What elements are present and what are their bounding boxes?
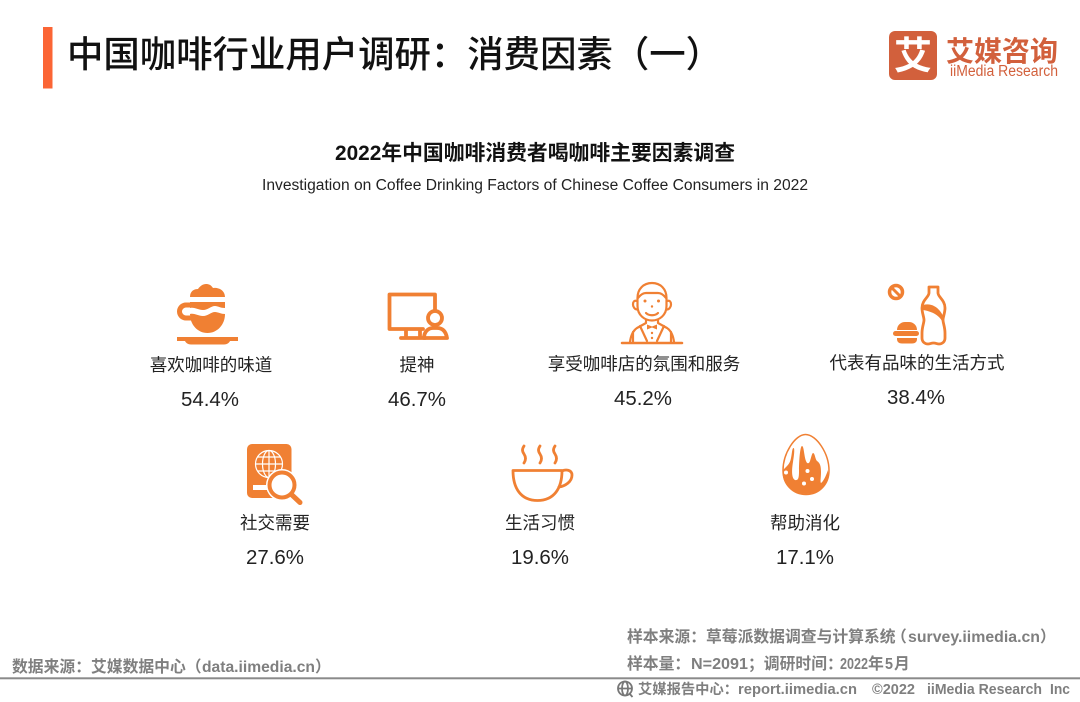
footer credit: report.iimedia.cn [738,682,857,698]
title: 中国咖啡行业用户调研：消费因素（一） [67,34,722,75]
logo: iiMedia Research [889,31,1058,80]
sample size note: 样本量： [627,654,690,673]
chart heading: 2022年中国咖啡消费者喝咖啡主要因素调查 [335,142,735,165]
label: 代表有品味的生活方式 [830,353,1004,373]
factor: taste of coffee [150,284,272,411]
sample size note: 2022 [840,656,868,673]
factor: represents a tasteful lifestyle [830,286,1004,409]
icon: waiter [622,283,682,343]
factor: refreshing [388,294,447,411]
label: 喜欢咖啡的味道 [150,355,272,375]
title accent bar [43,27,52,88]
footer credit: Inc [1050,682,1070,698]
sample source note: （ [891,628,907,646]
sample size note: ；调研时间： [748,655,843,673]
chart heading: Investigation on Coffee Drinking Factors of Chinese Coffee Consumers in 2022 [262,177,808,194]
factor: social needs [240,444,310,569]
value: 27.6% [246,547,304,569]
sample size note [627,654,910,673]
chart heading [262,142,808,194]
logo: iiMedia Research: 艾媒咨询 [946,36,1058,67]
icon: monitor with user [390,294,447,338]
logo: iiMedia Research: iiMedia Research [950,63,1058,80]
value: 45.2% [614,388,672,410]
icon: steaming cup [513,446,572,500]
sample source note: ） [1040,628,1056,646]
value: 19.6% [511,547,569,569]
icon: latte cup [177,284,238,344]
sample size note: 5 [885,656,893,673]
factor: cafe atmosphere and service [548,283,740,410]
footer credit: iiMedia Research [927,682,1042,698]
data source note [12,658,331,676]
footer credit: 艾媒报告中心： [638,680,738,698]
icon: globe and magnifier [247,444,300,502]
sample size note: N=2091 [691,656,748,673]
sample source note: survey.iimedia.cn [908,629,1040,646]
footer credit [618,680,1070,698]
label: 帮助消化 [770,513,840,533]
value: 46.7% [388,389,446,411]
sample source note: 样本来源：草莓派数据调查与计算系统 [627,627,896,646]
value: 38.4% [887,387,945,409]
value: 54.4% [181,389,239,411]
factor: habit [505,446,575,569]
data source note: ） [315,658,331,676]
logo: iiMedia Research: 艾 [894,36,932,78]
footer credit: ©2022 [872,682,915,698]
data source note: data.iimedia.cn [202,659,315,676]
icon: no sign, burger and bottle [890,286,945,344]
icon: globe [618,682,632,697]
sample size note: 年 [868,654,884,673]
icon: egg with drips [783,434,829,494]
label: 社交需要 [240,513,310,533]
label: 享受咖啡店的氛围和服务 [548,354,740,374]
label: 生活习惯 [505,513,575,533]
sample size note: 月 [894,656,910,673]
sample source note [627,627,1056,646]
face and bow tie details [644,300,660,339]
data source note: 数据来源：艾媒数据中心（ [12,658,202,676]
value: 17.1% [776,547,834,569]
factor: aids digestion [770,434,840,569]
label: 提神 [400,355,434,375]
